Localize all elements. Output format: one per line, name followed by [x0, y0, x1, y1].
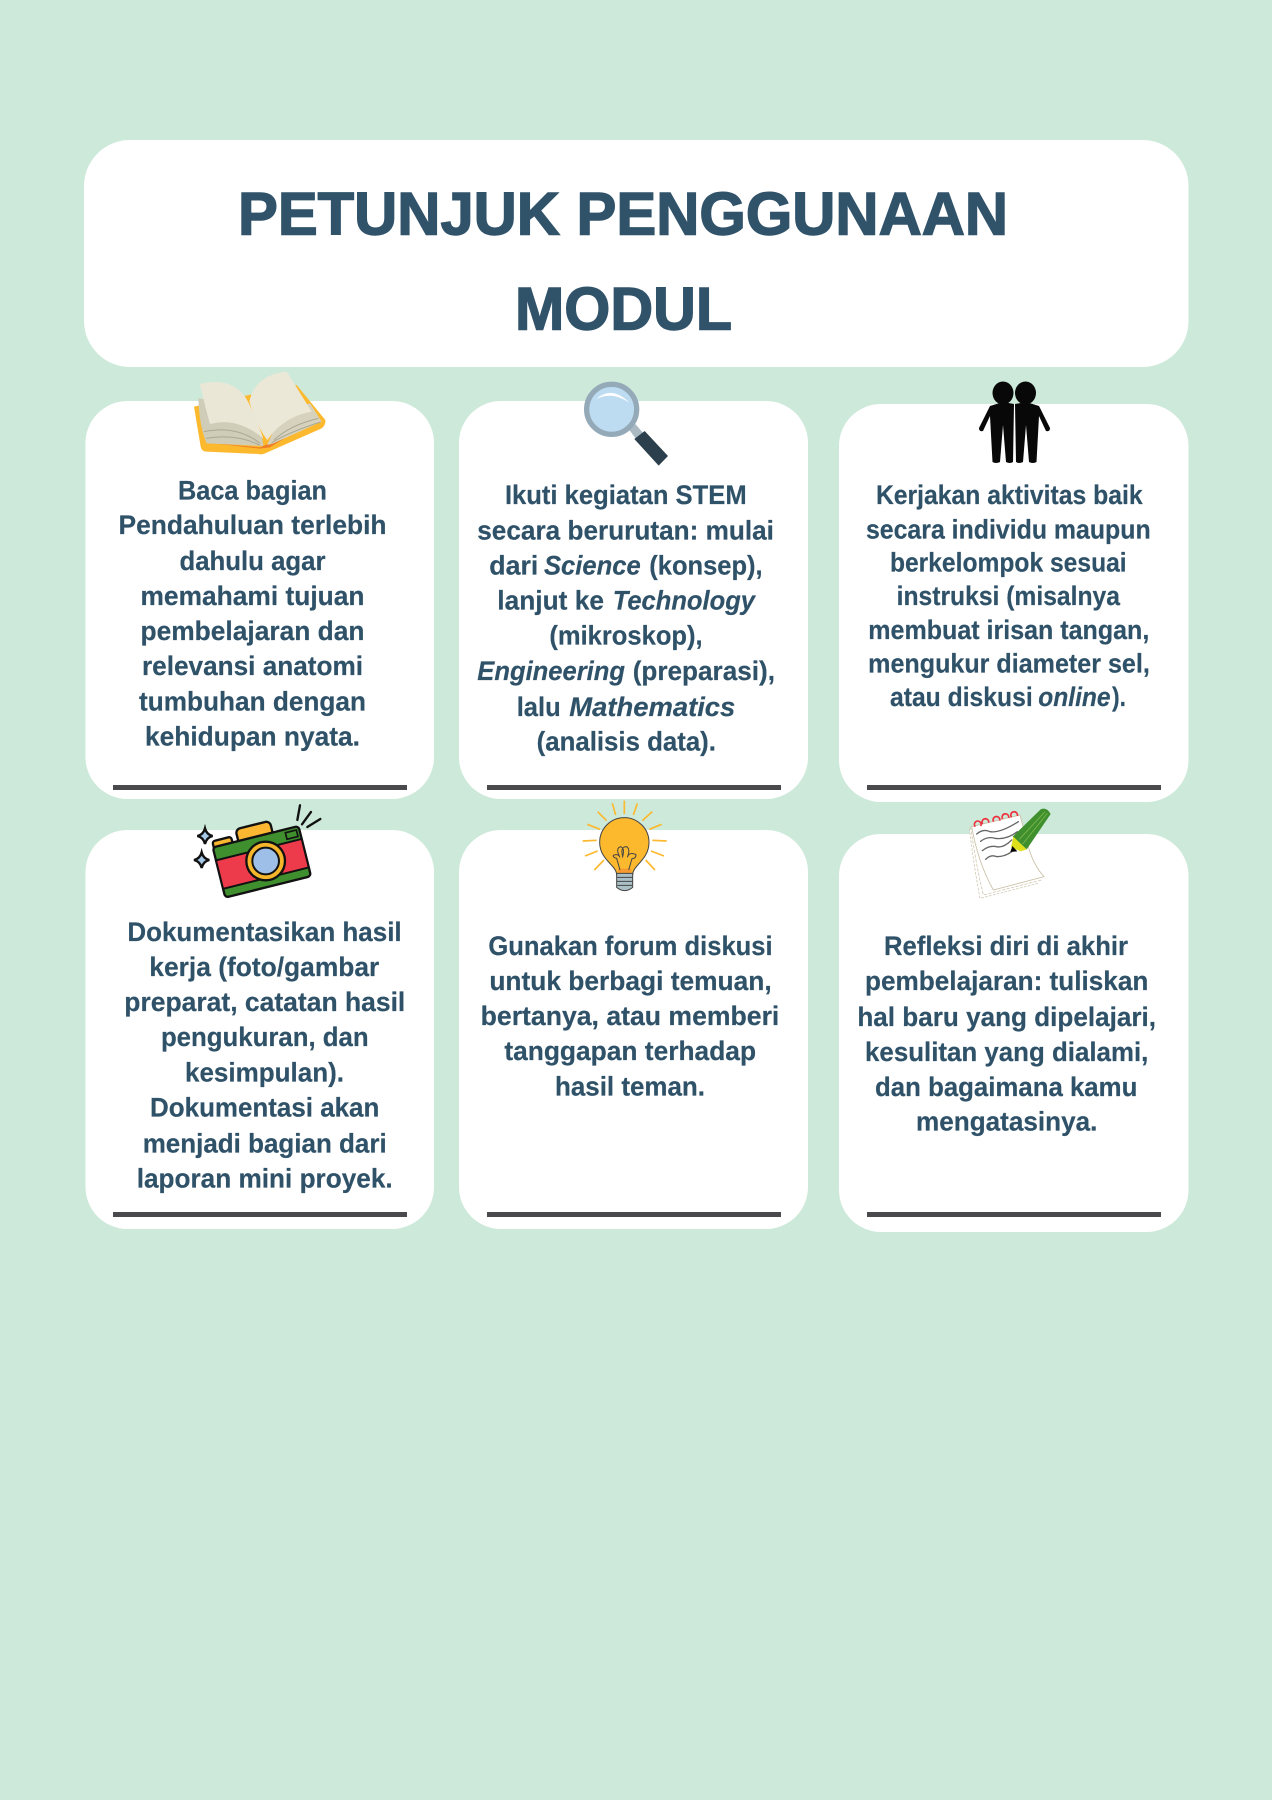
text: card 1: dahulu agar: [180, 546, 326, 576]
text: card 3: online: [1038, 682, 1111, 712]
text: card 2: dari: [489, 550, 538, 580]
text: card 4: Dokumentasikan hasil: [127, 917, 402, 947]
text: card 5: tanggapan terhadap: [504, 1036, 756, 1066]
text: card 1: memahami tujuan: [140, 581, 364, 611]
text: card 6: kesulitan yang dialami,: [865, 1037, 1148, 1067]
text: card 2: (konsep),: [649, 550, 763, 580]
text: card 6: hal baru yang dipelajari,: [857, 1002, 1156, 1032]
text: card 2: (preparasi),: [633, 656, 775, 686]
text: card 2: (analisis data).: [537, 727, 716, 757]
icon: notepad and pencil: [969, 809, 1051, 898]
title: [238, 180, 1008, 342]
text: card 5: Gunakan forum diskusi: [488, 931, 773, 961]
text: card 4: preparat, catatan hasil: [124, 987, 405, 1017]
text: card 6: mengatasinya.: [916, 1107, 1097, 1137]
title panel: [84, 140, 1188, 367]
text: card 2: lalu: [517, 692, 561, 722]
icon: magnifying glass: [587, 384, 668, 466]
panel: card 2 follow STEM activities: [459, 384, 808, 799]
panel: card 5 discussion forum: [459, 801, 808, 1229]
text: card 3: [866, 480, 1151, 712]
text: card 3: atau diskusi: [890, 682, 1033, 712]
text: card 4: pengukuran, dan: [161, 1022, 369, 1052]
text: card 2: Technology: [613, 585, 756, 615]
text: card 2: [477, 480, 775, 757]
panel: card 6 self reflection: [839, 809, 1188, 1232]
text: card 3: berkelompok sesuai: [890, 548, 1127, 578]
text: card 4: [124, 917, 405, 1194]
text: card 1: [118, 475, 386, 752]
text: card 5: bertanya, atau memberi: [481, 1001, 779, 1031]
text: card 6: [857, 931, 1156, 1137]
text: card 1: relevansi anatomi: [142, 651, 363, 681]
title: MODUL: [515, 276, 732, 342]
text: card 2: Ikuti kegiatan STEM: [505, 480, 747, 510]
text: card 1: pembelajaran dan: [140, 616, 364, 646]
text: card 4: kerja (foto/gambar: [149, 952, 379, 982]
text: card 5: hasil teman.: [555, 1072, 705, 1102]
text: card 2: Science: [544, 550, 641, 580]
text: card 4: Dokumentasi akan: [150, 1093, 379, 1123]
icon: light bulb: [583, 801, 667, 891]
panel: card 1 read introduction: [86, 372, 434, 799]
text: card 4: laporan mini proyek.: [137, 1164, 393, 1194]
panel: card 4 document work: [86, 805, 434, 1229]
text: card 2: secara berurutan: mulai: [477, 515, 774, 545]
title: PETUNJUK PENGGUNAAN: [238, 180, 1008, 248]
icon: open book: [194, 372, 325, 454]
text: card 2: (mikroskop),: [549, 621, 703, 651]
text: card 3: instruksi (misalnya: [897, 581, 1120, 611]
icon: two people: [979, 382, 1050, 463]
text: card 4: menjadi bagian dari: [143, 1128, 387, 1158]
text: card 3: Kerjakan aktivitas baik: [876, 480, 1143, 510]
text: card 6: Refleksi diri di akhir: [884, 931, 1128, 961]
icon: camera: [194, 805, 320, 898]
text: card 2: Mathematics: [569, 692, 735, 722]
text: card 1: Pendahuluan terlebih: [118, 510, 386, 540]
text: card 4: kesimpulan).: [185, 1058, 344, 1088]
text: card 3: mengukur diameter sel,: [868, 648, 1150, 678]
text: card 1: tumbuhan dengan: [139, 687, 366, 717]
text: card 1: Baca bagian: [178, 475, 327, 505]
text: card 5: [481, 931, 779, 1102]
text: card 2: Engineering: [477, 656, 625, 686]
text: card 3: secara individu maupun: [866, 514, 1151, 544]
text: card 2: lanjut ke: [497, 585, 604, 615]
text: card 3: ).: [1112, 682, 1126, 712]
text: card 6: dan bagaimana kamu: [875, 1072, 1137, 1102]
text: card 6: pembelajaran: tuliskan: [865, 966, 1148, 996]
text: card 1: kehidupan nyata.: [145, 722, 360, 752]
text: card 5: untuk berbagi temuan,: [489, 966, 772, 996]
panel: card 3 individual or group work: [839, 382, 1188, 802]
text: card 3: membuat irisan tangan,: [868, 615, 1149, 645]
